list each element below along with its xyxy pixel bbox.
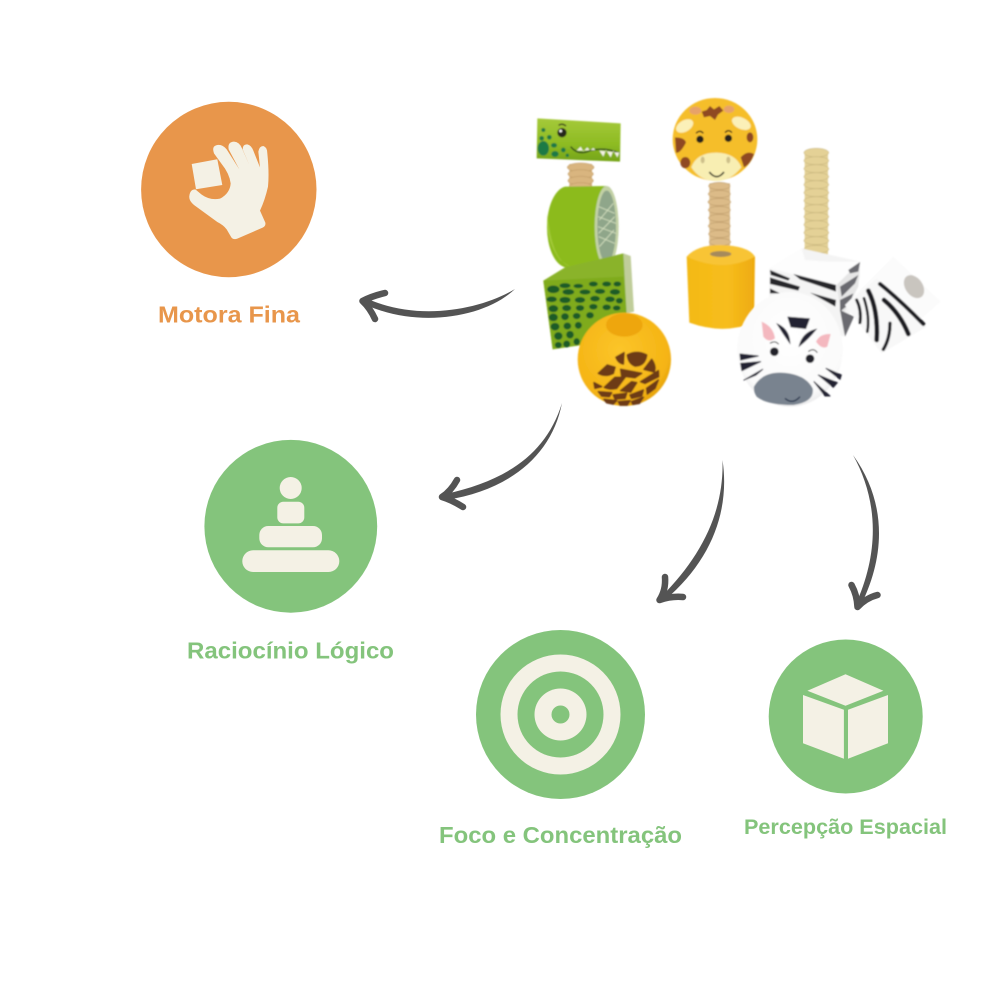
giraffe spring [708, 182, 731, 254]
label: Raciocínio Lógico: Raciocínio Lógico [187, 637, 394, 663]
label: Foco e Concentração: Foco e Concentração [439, 822, 682, 848]
label: Percepção Espacial: Percepção Espacial [744, 815, 947, 839]
label: Motora Fina: Motora Fina [158, 302, 300, 328]
panel: Motora Fina [141, 102, 316, 328]
zebra threaded bolt [804, 148, 829, 262]
toy photo: wooden animal blocks [537, 98, 941, 407]
icon: target [476, 630, 645, 799]
panel: Raciocínio Lógico [187, 440, 394, 663]
panel: Percepção Espacial [744, 640, 947, 839]
toy: crocodile stack and giraffe [537, 98, 757, 406]
arrow: toy to Motora Fina [362, 289, 515, 319]
giraffe base cylinder [687, 245, 755, 329]
arrow: toy to Foco e Concentração [660, 460, 724, 600]
icon: hand holding block [141, 102, 316, 277]
crocodile head block [537, 118, 621, 162]
crocodile spring [567, 163, 594, 191]
giraffe sphere [578, 313, 671, 406]
icon: stacking rings [204, 440, 377, 613]
giraffe head disc [673, 98, 757, 181]
panel: Foco e Concentração [439, 630, 682, 848]
crocodile box [543, 253, 634, 349]
icon: cube [769, 640, 923, 794]
arrow: toy to Percepção Espacial [852, 455, 879, 607]
toy: zebra pieces [737, 148, 941, 407]
green cylinder [547, 186, 619, 267]
arrow: toy to Raciocínio Lógico [442, 403, 562, 507]
loose zebra cube [845, 257, 941, 353]
zebra head sphere [737, 292, 843, 407]
zebra box with bolt [769, 248, 860, 337]
